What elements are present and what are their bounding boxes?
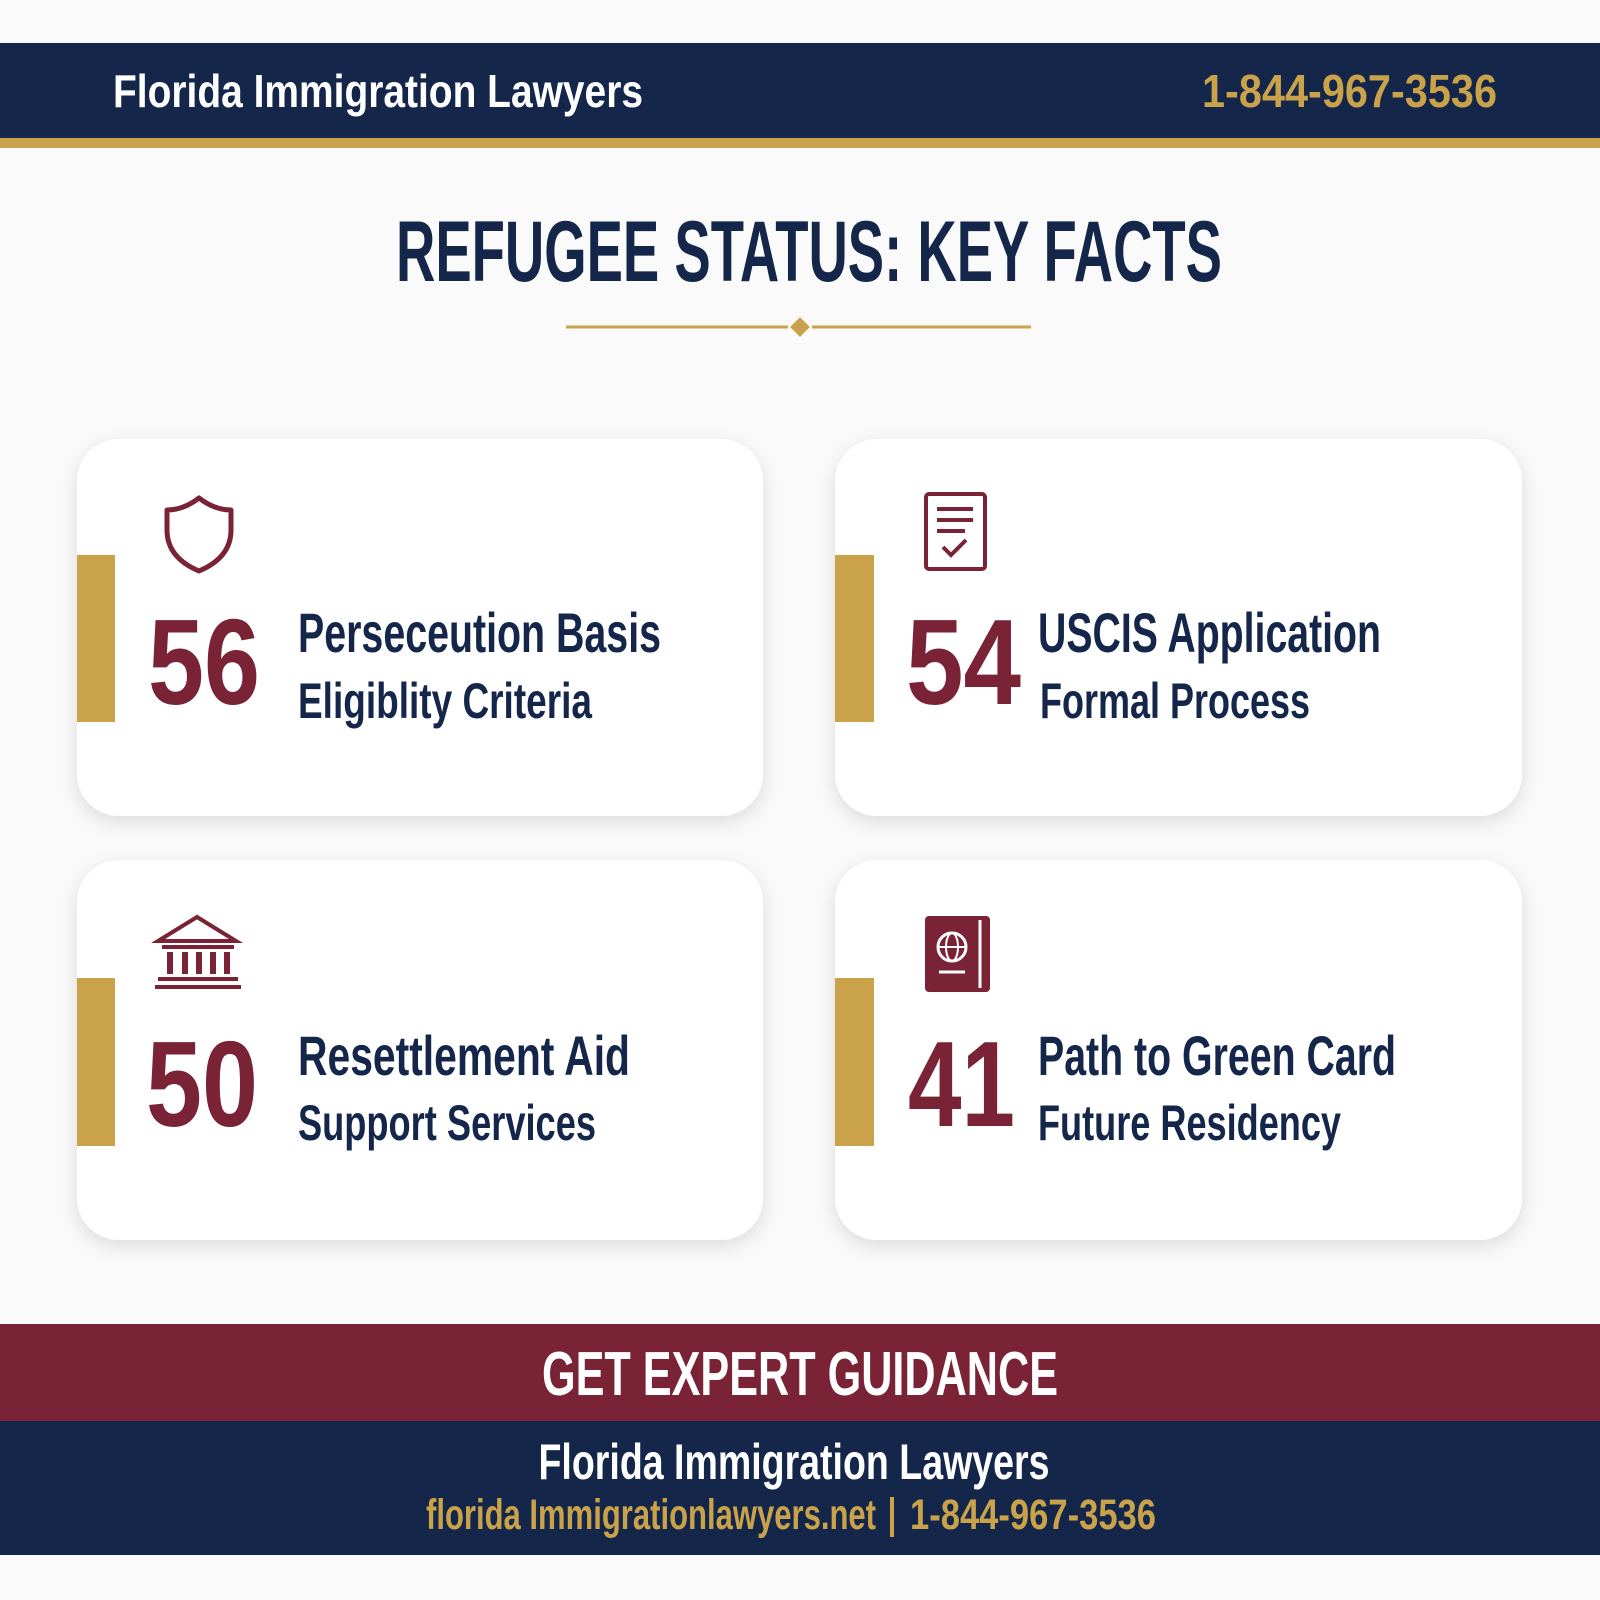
- title divider: [566, 317, 1031, 337]
- card: USCIS application: Formal Process: [1040, 673, 1310, 729]
- icon: passport: [925, 916, 990, 992]
- footer: 1-844-967-3536: [910, 1491, 1156, 1539]
- header firm name: Florida Immigration Lawyers: [113, 65, 643, 117]
- card: path to green card: 41: [908, 1016, 1015, 1152]
- card: USCIS application: [835, 439, 1522, 816]
- card: USCIS application: 54: [906, 594, 1021, 730]
- cta band: [0, 1324, 1600, 1421]
- card: resettlement aid: 50: [146, 1016, 258, 1152]
- footer: [0, 1421, 1600, 1555]
- card: perseceution basis: Perseceution Basis: [298, 601, 661, 664]
- card: perseceution basis: 56: [148, 594, 260, 730]
- icon: building: [155, 917, 241, 989]
- card: resettlement aid: Resettlement Aid: [298, 1024, 630, 1087]
- card: USCIS application: USCIS Application: [1038, 601, 1381, 664]
- card: perseceution basis: [77, 439, 763, 816]
- footer: Florida Immigration Lawyers: [538, 1434, 1050, 1490]
- icon: document check: [926, 494, 985, 569]
- card: path to green card: Future Residency: [1038, 1095, 1341, 1151]
- cta band: GET EXPERT GUIDANCE: [542, 1340, 1058, 1409]
- card: perseceution basis: Eligiblity Criteria: [298, 673, 593, 729]
- footer: florida Immigrationlawyers.net: [426, 1491, 876, 1539]
- card: path to green card: Path to Green Card: [1038, 1024, 1396, 1087]
- card: path to green card: [835, 860, 1522, 1240]
- header phone: 1-844-967-3536: [1202, 65, 1497, 117]
- header bar: [0, 43, 1600, 148]
- icon: shield: [167, 498, 231, 571]
- card: resettlement aid: [77, 860, 763, 1240]
- card: resettlement aid: Support Services: [298, 1095, 596, 1151]
